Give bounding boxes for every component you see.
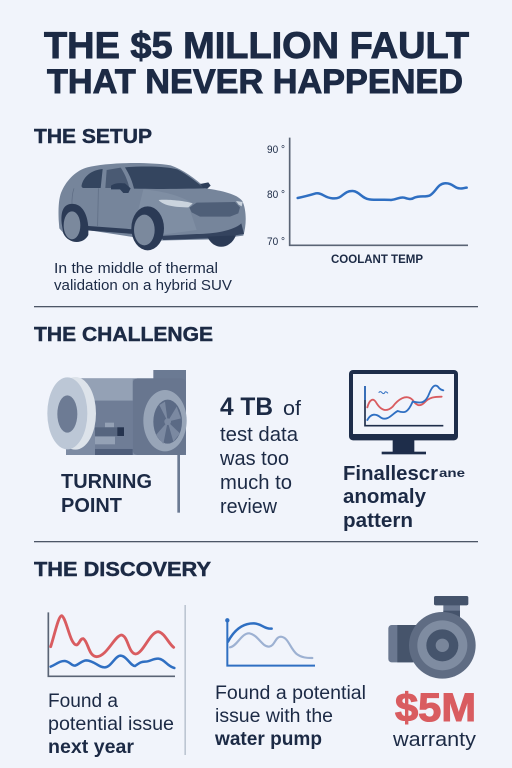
label: turning point bbox=[61, 471, 152, 517]
line chart: coolant temp: COOLANT TEMP bbox=[331, 254, 423, 266]
line chart: coolant temp: 80 ° bbox=[267, 189, 285, 201]
label: turning point: TURNING bbox=[61, 471, 152, 493]
stat: $5M warranty: warranty bbox=[392, 729, 476, 751]
text block: 4 TB of test data bbox=[219, 393, 301, 518]
label: turning point: POINT bbox=[61, 495, 122, 517]
text block: 4 TB of test data: was too bbox=[219, 448, 289, 470]
label: final screen anomaly pattern: anomaly bbox=[343, 486, 427, 508]
text block: 4 TB of test data: review bbox=[220, 496, 278, 518]
panel: the discovery bbox=[34, 559, 476, 758]
label: final screen anomaly pattern: Finallescr bbox=[343, 463, 438, 485]
icon: monitor with anomaly chart bbox=[349, 370, 458, 454]
text block: 4 TB of test data: test data bbox=[220, 424, 299, 446]
text block: setup description: In the middle of thermal bbox=[54, 260, 218, 277]
title bbox=[44, 25, 469, 101]
text block: water pump: Found a potential bbox=[215, 683, 366, 704]
text block: water pump: issue with the bbox=[215, 706, 333, 727]
text block: 4 TB of test data: much to bbox=[220, 472, 292, 494]
label: final screen anomaly pattern: pattern bbox=[343, 510, 413, 532]
line chart: water pump issue bbox=[225, 618, 315, 666]
icon: engine test rig bbox=[47, 370, 187, 513]
text block: water pump bbox=[214, 683, 366, 750]
title: THE $5 MILLION FAULT bbox=[44, 25, 469, 66]
text block: setup description bbox=[54, 260, 232, 294]
icon: hybrid SUV bbox=[58, 163, 246, 250]
label: final screen anomaly pattern bbox=[343, 463, 465, 532]
line chart: next year issue bbox=[48, 612, 175, 676]
text block: setup description: validation on a hybrid SUV bbox=[54, 277, 232, 294]
heading: the challenge: THE CHALLENGE bbox=[34, 324, 213, 346]
text block: 4 TB of test data: 4 TB bbox=[220, 393, 273, 421]
label: final screen anomaly pattern: ane bbox=[439, 466, 465, 480]
text block: water pump: water pump bbox=[214, 729, 322, 750]
line chart: coolant temp bbox=[267, 138, 468, 266]
line chart: coolant temp: 90 ° bbox=[267, 144, 285, 156]
text block: next year: next year bbox=[48, 737, 135, 758]
panel: the setup bbox=[34, 126, 468, 294]
text block: next year: potential issue bbox=[48, 714, 174, 735]
icon: water pump bbox=[388, 596, 476, 679]
heading: the setup: THE SETUP bbox=[34, 126, 152, 148]
title: THAT NEVER HAPPENED bbox=[47, 63, 463, 101]
line chart: coolant temp: 70 ° bbox=[267, 236, 285, 248]
text block: 4 TB of test data: of bbox=[283, 398, 301, 420]
stat: $5M warranty: $5M bbox=[395, 686, 476, 730]
text block: next year bbox=[48, 691, 174, 758]
stat: $5M warranty bbox=[392, 686, 476, 751]
text block: next year: Found a bbox=[48, 691, 118, 712]
heading: the discovery: THE DISCOVERY bbox=[34, 559, 212, 581]
panel: the challenge bbox=[34, 324, 465, 532]
